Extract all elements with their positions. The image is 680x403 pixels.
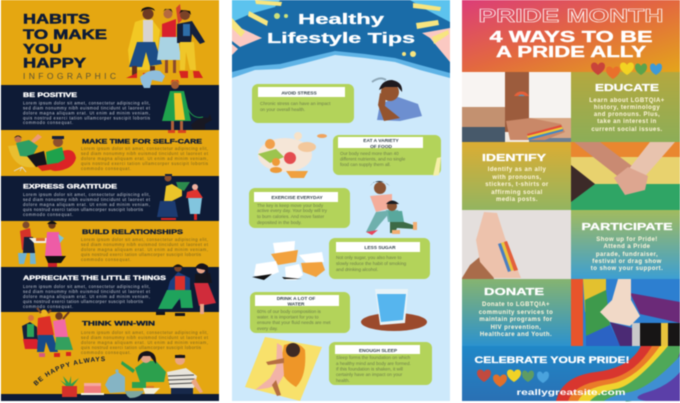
illustration: two friends laughing [156, 263, 216, 316]
section: build relationships: sed diam nonummy nibh euismod tincidunt ut laoreet et [81, 242, 209, 247]
section: build relationships [81, 230, 209, 262]
section: think win-win: quis nostrud exerci tation ullamcorper suscipit lobortis [81, 345, 201, 350]
decorative yellow strokes [232, 0, 449, 57]
section: make time for self-care: commodo consequat. [81, 166, 131, 171]
card: exercise everyday: EXERCISE EVERYDAY [271, 195, 323, 201]
card: enough sleep: If this foundation is shaken, it will [336, 366, 403, 372]
header: A PRIDE ALLY [496, 44, 647, 61]
text block: participate: festival or drag show [592, 259, 662, 265]
card: less sugar: LESS SUGAR [364, 245, 396, 251]
section: express gratitude: commodo consequat. [23, 212, 73, 217]
section: appreciate the little things: commodo consequat. [23, 304, 73, 309]
text block: identify: media posts. [496, 197, 538, 203]
card: enough sleep: Sleep forms the foundation on which [336, 355, 411, 360]
section: express gratitude [23, 184, 151, 217]
text block: participate [571, 210, 680, 279]
footer banner: CELEBRATE YOUR PRIDE! [474, 355, 630, 366]
card: exercise everyday: deposited in the body. [257, 220, 302, 225]
card: eat a variety of food [333, 135, 441, 175]
card: avoid stress: on your overall health. [260, 107, 305, 112]
text block: identify: IDENTIFY [482, 152, 546, 164]
text block: educate: and pronouns. Plus, [594, 112, 660, 118]
section: build relationships: BUILD RELATIONSHIPS [82, 230, 183, 236]
text block: donate: Donate to LGBTQIA+ [482, 302, 550, 308]
text block: identify: affirming social [491, 190, 543, 196]
icon: potted plant [60, 376, 79, 397]
text block: participate: to show your support. [591, 266, 663, 272]
text block: identify: stickers, t-shirts or [485, 182, 549, 188]
section: think win-win: THINK WIN-WIN [82, 322, 155, 328]
card: enough sleep [329, 342, 432, 385]
section: be positive: dolore magna aliquam erat. Ut enim ad minim veniam, [23, 110, 150, 116]
section: be positive: BE POSITIVE [23, 93, 77, 99]
card: exercise everyday: to burn calories. And move faster [257, 214, 325, 219]
illustration: three friends cheering [22, 308, 73, 357]
header: PRIDE MONTH [478, 6, 664, 26]
section: think win-win: commodo consequat. [81, 350, 131, 355]
title: YOU [23, 42, 62, 56]
section: make time for self-care [81, 140, 209, 171]
card: drink a lot of water: water. It is important for you to [257, 314, 319, 320]
section: make time for self-care: Lorem ipsum dolor sit amet, consectetur adipiscing elit, [81, 146, 208, 151]
section: be positive [23, 93, 151, 125]
card: avoid stress [252, 84, 354, 123]
text block: identify [462, 142, 571, 210]
section: be positive: sed diam nonummy nibh euismod tincidunt ut laoreet et [23, 106, 151, 110]
photo: hands with rainbow stripe [462, 210, 571, 279]
section: think win-win [81, 322, 209, 355]
illustration: group of three friends [126, 4, 205, 88]
icon: blue cat [140, 70, 165, 88]
illustration: two friends relaxing in chairs [8, 134, 76, 172]
section: express gratitude: dolore magna aliquam erat. Ut enim ad minim veniam, [23, 202, 150, 207]
section: think win-win: dolore magna aliquam erat. Ut enim ad minim veniam, [81, 340, 208, 345]
section: be positive: Lorem ipsum dolor sit amet, consectetur adipiscing elit, [23, 100, 150, 106]
section: make time for self-care: sed diam nonummy nibh euismod tincidunt ut laoreet et [81, 151, 209, 156]
panel: healthy lifestyle tips [232, 0, 450, 401]
section: make time for self-care: dolore magna aliquam erat. Ut enim ad minim veniam, [81, 156, 208, 161]
section: express gratitude: EXPRESS GRATITUDE [23, 184, 117, 190]
card: enough sleep: a healthy mind and body are formed. [336, 361, 411, 366]
card: eat a variety of food: EAT A VARIETY [363, 138, 400, 144]
header [462, 0, 680, 72]
icon: teapot [105, 369, 125, 393]
text block: participate: Show up for Pride! [596, 237, 658, 243]
card: drink a lot of water: DRINK A LOT OF [277, 296, 315, 302]
card: less sugar [329, 238, 430, 279]
illustration: sugar cubes [252, 241, 325, 280]
text block: donate: community services to [479, 310, 553, 316]
rainbow swoosh [556, 346, 680, 402]
title [267, 11, 415, 47]
text block: participate: Attend a Pride [604, 244, 651, 250]
card: avoid stress: AVOID STRESS [281, 90, 317, 96]
card: avoid stress: Chronic stress can have an impact [260, 101, 331, 106]
text block: donate: HIV prevention, [491, 325, 541, 331]
photo: holding hands over flag [571, 142, 680, 210]
text block: educate [571, 72, 680, 142]
illustration: two friends exchanging a gift [157, 174, 203, 220]
section: build relationships: quis nostrud exerci tation ullamcorper suscipit lobortis [81, 252, 201, 257]
title: TO MAKE [23, 27, 107, 42]
header wave [232, 0, 450, 78]
card: drink a lot of water: WATER [288, 302, 305, 308]
card: drink a lot of water: 60% of our body composition is [257, 309, 322, 314]
card: enough sleep: ENOUGH SLEEP [359, 348, 398, 354]
card: drink a lot of water: every day. [257, 326, 278, 331]
section: appreciate the little things: APPRECIATE THE LITTLE THINGS [23, 275, 167, 282]
title: HAPPY [23, 56, 86, 70]
text block: identify: Identify as an ally [488, 167, 546, 173]
illustration: stressed person [372, 78, 422, 121]
section: appreciate the little things: Lorem ipsum dolor sit amet, consectetur adipiscing elit, [23, 284, 150, 289]
card: enough sleep: health. [336, 378, 350, 383]
text block: donate: Healthcare and Youth. [480, 332, 552, 338]
section: make time for self-care: MAKE TIME FOR SELF-CARE [82, 140, 202, 146]
card: exercise everyday: The key is keep move your body [257, 203, 324, 208]
section: express gratitude: quis nostrud exerci tation ullamcorper suscipit lobortis [23, 207, 143, 212]
illustration: parent and child running [366, 181, 417, 235]
card: less sugar: Not only sugar, you also have to [336, 255, 402, 260]
photo: two people with rainbow paint [462, 72, 571, 142]
card: exercise everyday: active every day. Your body will try [257, 208, 328, 213]
title: Healthy [298, 11, 385, 28]
illustration: glass of water on coaster [361, 289, 427, 331]
section: be positive: commodo consequat. [23, 120, 73, 125]
card: eat a variety of food: Our body need more than 40 [340, 151, 399, 156]
illustration: person sleeping on yellow mat [245, 337, 322, 401]
icon: hearts row [477, 369, 549, 387]
card: eat a variety of food: different nutrients, and no single [340, 156, 406, 162]
text block: educate: EDUCATE [595, 82, 659, 94]
footer banner [462, 346, 680, 402]
illustration: plate of food [258, 132, 441, 178]
section: build relationships: Lorem ipsum dolor sit amet, consectetur adipiscing elit, [81, 237, 208, 242]
illustration: woman in green coat walking dog [162, 80, 212, 133]
section: appreciate the little things: sed diam nonummy nibh euismod tincidunt ut laoreet et [23, 289, 151, 294]
section: think win-win: sed diam nonummy nibh euismod tincidunt ut laoreet et [81, 335, 209, 340]
card: drink a lot of water: ensure that your fluid needs are met [257, 320, 331, 325]
card: exercise everyday [249, 188, 350, 228]
text block: educate: history, terminology [594, 105, 660, 111]
title: HABITS [23, 12, 90, 26]
icon: rainbow hearts [591, 62, 662, 79]
footer banner: reallygreatsite.com [516, 388, 626, 397]
subtitle: INFOGRAPHIC [23, 71, 116, 81]
icon: cake [81, 383, 104, 395]
card: eat a variety of food: OF FOOD [370, 144, 392, 150]
illustration: friends sharing tea and food [60, 351, 203, 398]
text block: donate: maintain programs for [479, 317, 553, 323]
curved tagline: be happy always: BE HAPPY ALWAYS [32, 356, 106, 386]
text block: educate: take an interest in [597, 119, 657, 125]
text block: participate: PARTICIPATE [582, 221, 672, 233]
section: appreciate the little things: quis nostrud exerci tation ullamcorper suscipit lobortis [23, 299, 143, 304]
text block: donate [462, 279, 571, 346]
illustration: two people sharing a plate [18, 221, 66, 267]
title [23, 12, 107, 70]
section: be positive: quis nostrud exerci tation ullamcorper suscipit lobortis [23, 116, 150, 120]
card: less sugar: slowly reduce the habit of smoking [336, 261, 407, 266]
icon: bowls [125, 382, 160, 398]
section: appreciate the little things [23, 275, 167, 309]
card: eat a variety of food: food can supply them all. [340, 162, 391, 167]
section: express gratitude: sed diam nonummy nibh euismod tincidunt ut laoreet et [23, 197, 151, 202]
header: 4 WAYS TO BE [490, 29, 652, 46]
section: appreciate the little things: dolore magna aliquam erat. Ut enim ad minim veniam, [23, 294, 150, 299]
card: drink a lot of water [250, 292, 350, 333]
text block: educate: Learn about LGBTQIA+ [589, 98, 665, 104]
text block: donate: DONATE [484, 286, 544, 298]
section: build relationships: commodo consequat. [81, 257, 131, 262]
photo: fist with rainbow flag [571, 279, 680, 346]
section: express gratitude: Lorem ipsum dolor sit amet, consectetur adipiscing elit, [23, 192, 150, 197]
panel: habits to make you happy [0, 0, 220, 402]
text block: educate: current social issues. [591, 127, 663, 133]
section: think win-win: Lorem ipsum dolor sit amet, consectetur adipiscing elit, [81, 330, 208, 335]
card: less sugar: and drinking alcohol. [336, 267, 378, 272]
section: make time for self-care: quis nostrud exerci tation ullamcorper suscipit lobortis [81, 161, 208, 166]
text block: participate: parade, fundraiser, [596, 252, 658, 258]
text block: identify: with pronouns, [491, 175, 542, 181]
section: build relationships: dolore magna aliquam erat. Ut enim ad minim veniam, [81, 247, 208, 252]
title: Lifestyle Tips [267, 30, 415, 47]
panel: pride month [462, 0, 680, 402]
card: enough sleep: certainly have an impact on your [336, 372, 403, 377]
